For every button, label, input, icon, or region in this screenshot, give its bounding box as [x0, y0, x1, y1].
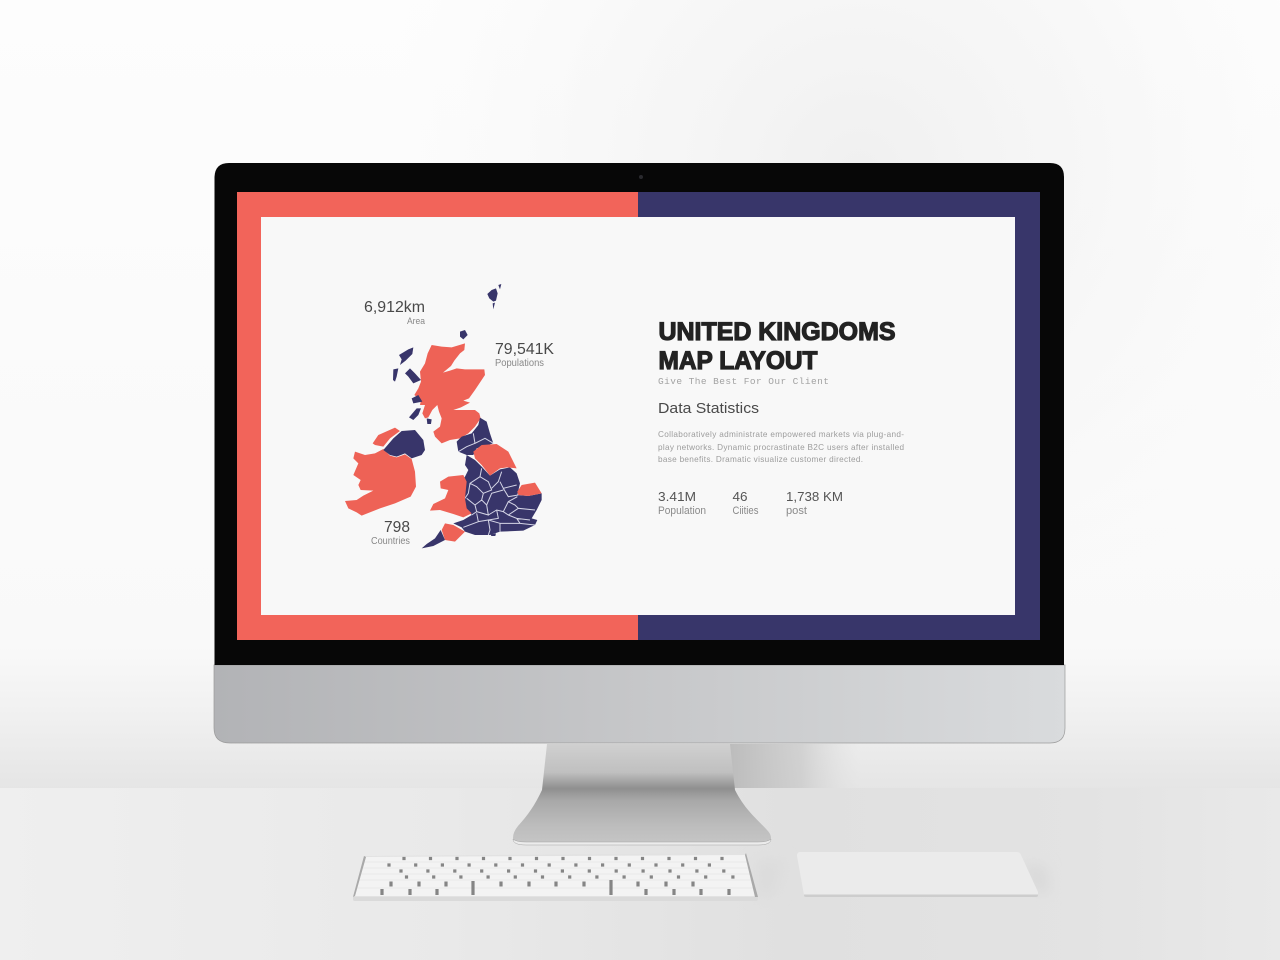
metric: post [786, 489, 843, 517]
East Anglia [517, 483, 542, 496]
title [658, 318, 896, 375]
metric: cities [732, 489, 759, 517]
Great Britain north: Scotland and islands [393, 330, 485, 443]
stat: area [364, 299, 425, 326]
metric: cities: 46 [732, 489, 748, 504]
stat: populations [495, 341, 554, 369]
Outer Hebrides [393, 347, 413, 382]
navy frame half [638, 192, 1040, 640]
Northern England borders [458, 433, 493, 452]
desk surface [0, 788, 1280, 960]
Isle of Wight [491, 533, 496, 536]
coral frame half [237, 192, 638, 640]
stat: area: Area [407, 316, 425, 326]
stat: countries: 798 [384, 519, 410, 536]
stat: countries: Countries [371, 536, 410, 547]
metric: post: 1,738 KM [786, 489, 843, 504]
slide inner panel [261, 217, 1015, 615]
stat: area: 6,912km [364, 299, 425, 316]
slide [237, 192, 1040, 640]
title: UNITED KINGDOMS [658, 318, 896, 346]
Cornwall [422, 530, 445, 548]
monitor stand [513, 744, 771, 845]
metric: population: 3.41M [658, 489, 696, 504]
monitor chin [214, 665, 1065, 743]
heading: data statistics: Data Statistics [658, 400, 759, 417]
body text: play networks. Dynamic procrastinate B2C users after installed [658, 443, 904, 452]
Yorkshire [473, 444, 517, 476]
title: MAP LAYOUT [658, 347, 818, 375]
metric: cities: Ciities [732, 505, 759, 517]
metric: population [658, 489, 706, 517]
body text: Collaboratively administrate empowered markets via plug-and- [658, 430, 904, 439]
map: UK and Ireland [345, 284, 542, 548]
Ireland [345, 428, 425, 516]
Wales [430, 475, 472, 517]
monitor bezel [214, 163, 1064, 665]
Devon [442, 523, 465, 542]
subtitle: Give The Best For Our Client [658, 376, 829, 387]
metric: population: Population [658, 505, 706, 517]
Shetland [457, 284, 501, 455]
webcam [639, 175, 643, 179]
keyboard [353, 853, 785, 901]
England, Wales and Cornwall [422, 444, 542, 548]
body text [658, 430, 904, 464]
stat: populations: 79,541K [495, 341, 554, 358]
county borders [463, 468, 535, 535]
stat: populations: Populations [495, 358, 544, 369]
Republic of Ireland [345, 449, 416, 516]
Northern England [457, 418, 493, 455]
Inner Hebrides [405, 368, 432, 424]
monitor [214, 163, 1065, 743]
Donegal [373, 428, 400, 447]
Northern Ireland [383, 430, 425, 458]
England [453, 455, 542, 535]
stat: countries [371, 519, 410, 547]
body text: base benefits. Dramatic visualize customer directed. [658, 455, 863, 464]
metric: post: post [786, 505, 807, 517]
trackpad [797, 852, 1050, 897]
Scotland [414, 343, 485, 443]
stand shadow on wall [730, 744, 860, 788]
Orkney [460, 330, 468, 339]
